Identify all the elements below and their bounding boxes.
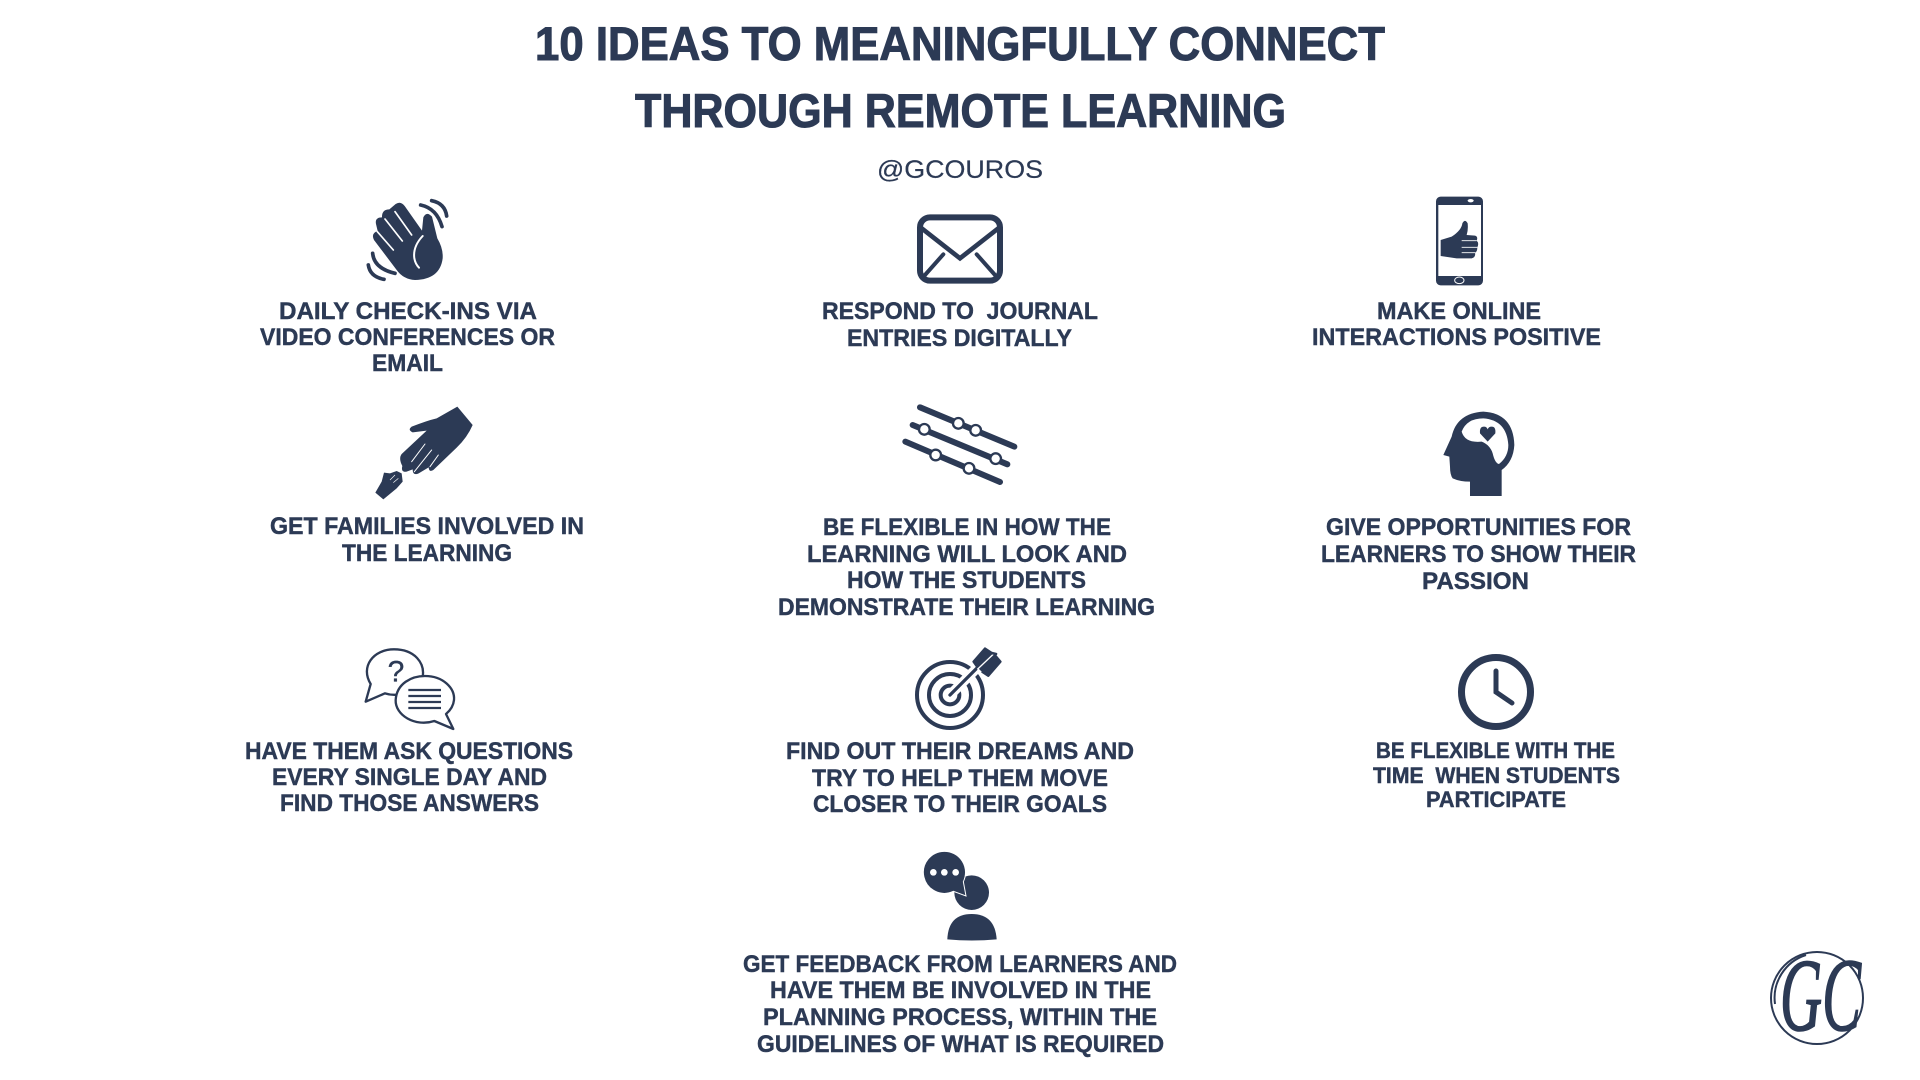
text: families involved: THE LEARNING	[342, 540, 512, 567]
panel: flexible time	[1373, 658, 1620, 812]
text: positive interactions: INTERACTIONS POSITIVE	[1312, 324, 1601, 351]
icon: phone with thumbs up	[1436, 197, 1483, 285]
text: show passion	[1321, 514, 1636, 595]
text: show passion: LEARNERS TO SHOW THEIR	[1321, 541, 1636, 568]
panel: daily check-ins	[260, 201, 555, 377]
text: flexible learning: BE FLEXIBLE IN HOW THE	[823, 514, 1111, 541]
text: learner feedback: HAVE THEM BE INVOLVED IN THE	[770, 977, 1151, 1004]
text: flexible time: PARTICIPATE	[1426, 787, 1566, 812]
text: positive interactions	[1312, 298, 1601, 351]
panel: learner feedback	[743, 851, 1177, 1058]
icon: waving hand	[368, 201, 447, 280]
text: daily check-ins: VIDEO CONFERENCES OR	[260, 324, 555, 351]
icon: speech bubbles	[366, 649, 454, 729]
text: ask questions	[245, 738, 573, 817]
text: flexible learning	[778, 514, 1155, 621]
panel: positive interactions	[1312, 197, 1601, 351]
text: daily check-ins	[260, 298, 555, 377]
text: daily check-ins: EMAIL	[372, 350, 443, 377]
panel: respond to journal	[822, 217, 1098, 352]
text: ask questions: EVERY SINGLE DAY AND	[272, 764, 547, 791]
text: families involved: GET FAMILIES INVOLVED IN	[270, 513, 584, 540]
text: learner feedback: PLANNING PROCESS, WITHIN THE	[763, 1004, 1157, 1031]
panel: show passion	[1321, 412, 1636, 595]
subtitle: handle: @GCOUROS	[877, 156, 1043, 184]
text: flexible learning: LEARNING WILL LOOK AND	[807, 541, 1127, 568]
panel: flexible learning	[778, 407, 1155, 621]
icon: sliders	[905, 407, 1014, 482]
title: THROUGH REMOTE LEARNING	[635, 84, 1286, 137]
panel: ask questions	[245, 649, 573, 817]
text: flexible time: BE FLEXIBLE WITH THE	[1376, 738, 1615, 763]
icon: speech bubbles: ?	[388, 656, 404, 689]
text: respond to journal: ENTRIES DIGITALLY	[847, 325, 1072, 352]
title: 10 IDEAS TO MEANINGFULLY CONNECT	[535, 17, 1385, 70]
panel: dreams and goals	[786, 648, 1134, 818]
text: ask questions: FIND THOSE ANSWERS	[280, 790, 539, 817]
text: dreams and goals: CLOSER TO THEIR GOALS	[813, 791, 1107, 818]
icon: person with speech bubble	[923, 851, 997, 940]
icon: reaching hands	[375, 407, 473, 499]
text: flexible learning: HOW THE STUDENTS	[847, 567, 1086, 594]
text: respond to journal: RESPOND TO JOURNAL	[822, 298, 1098, 325]
text: dreams and goals: TRY TO HELP THEM MOVE	[812, 765, 1108, 792]
icon: target with arrow	[917, 648, 1001, 728]
icon: clock	[1462, 658, 1530, 726]
text: ask questions: HAVE THEM ASK QUESTIONS	[245, 738, 573, 765]
text: learner feedback: GET FEEDBACK FROM LEARNERS AND	[743, 951, 1177, 978]
text: respond to journal	[822, 298, 1098, 352]
icon: envelope	[920, 217, 1000, 281]
panel: families involved	[270, 407, 584, 567]
text: families involved	[270, 513, 584, 567]
text: show passion: GIVE OPPORTUNITIES FOR	[1326, 514, 1631, 541]
text: positive interactions: MAKE ONLINE	[1377, 298, 1541, 325]
text: learner feedback	[743, 951, 1177, 1058]
text: show passion: PASSION	[1422, 568, 1529, 595]
text: dreams and goals	[786, 738, 1134, 818]
logo: GC monogram	[1771, 938, 1863, 1053]
title	[535, 17, 1385, 137]
text: flexible time: TIME WHEN STUDENTS	[1373, 763, 1620, 788]
text: flexible learning: DEMONSTRATE THEIR LEARNING	[778, 594, 1155, 621]
text: dreams and goals: FIND OUT THEIR DREAMS AND	[786, 738, 1134, 765]
text: daily check-ins: DAILY CHECK-INS VIA	[279, 298, 537, 325]
icon: head with heart	[1443, 412, 1514, 496]
text: flexible time	[1373, 738, 1620, 812]
text: learner feedback: GUIDELINES OF WHAT IS REQUIRED	[757, 1031, 1164, 1058]
